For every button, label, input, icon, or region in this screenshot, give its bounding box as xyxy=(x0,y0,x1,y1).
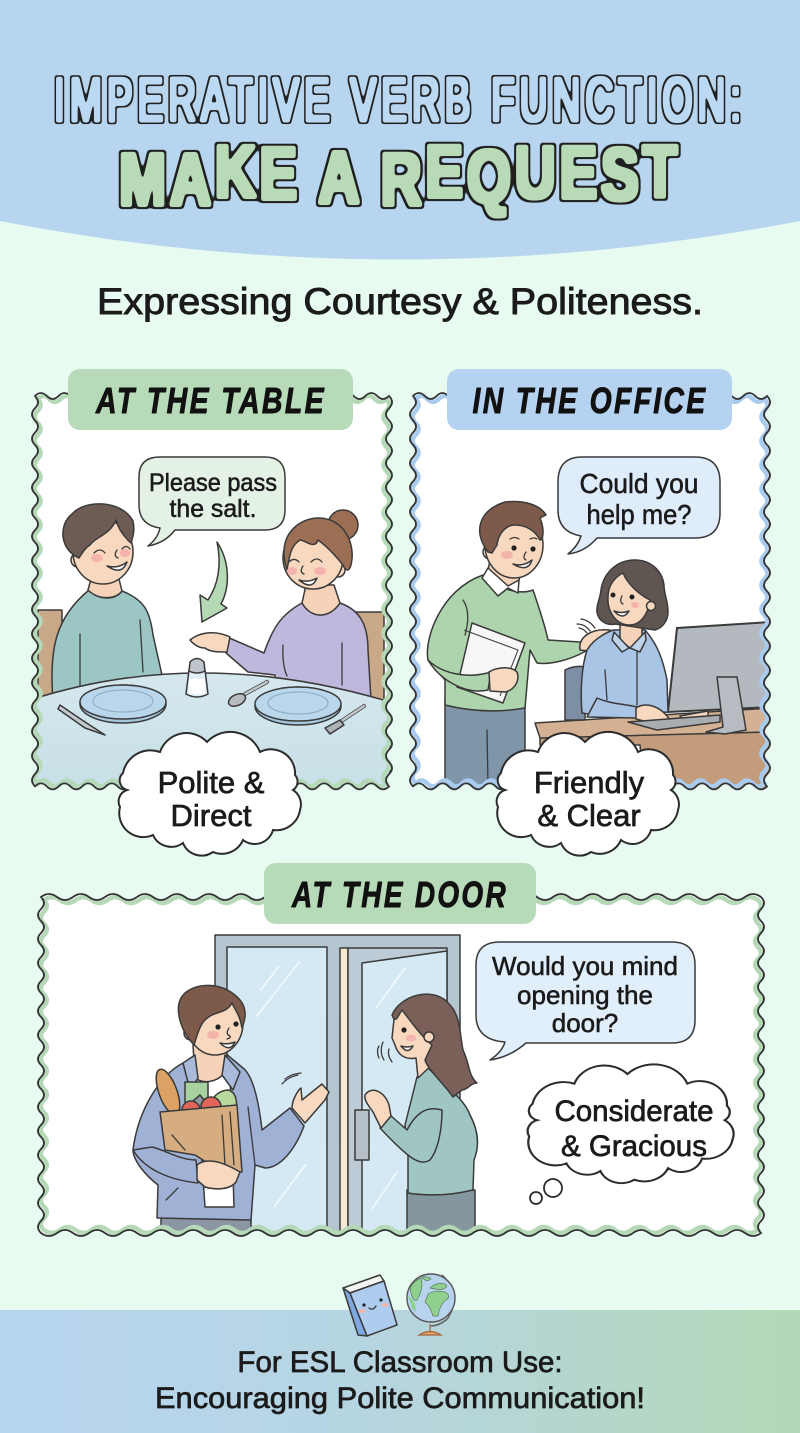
icon: book xyxy=(343,1275,397,1336)
salt shaker xyxy=(186,658,208,697)
title xyxy=(54,66,746,221)
speech bubble: Could you xyxy=(580,468,698,499)
chairs xyxy=(38,610,384,707)
frame border xyxy=(38,894,764,1236)
woman at door xyxy=(365,994,477,1240)
door frame and glass xyxy=(215,935,460,1243)
thought cloud: & Gracious xyxy=(561,1130,707,1163)
office scene illustration xyxy=(427,502,770,800)
heading tab: AT THE TABLE xyxy=(95,380,326,421)
speech bubble: opening the xyxy=(517,980,653,1010)
speech bubble xyxy=(558,457,720,554)
panel: at the door xyxy=(38,863,764,1243)
panel: in the office xyxy=(410,369,770,856)
speech bubble xyxy=(476,942,695,1060)
heading tab xyxy=(264,863,536,924)
icon: globe xyxy=(407,1274,455,1335)
speech bubble: help me? xyxy=(586,499,692,530)
thought cloud xyxy=(528,1064,734,1204)
footer band xyxy=(0,1310,800,1433)
speech bubble: Would you mind xyxy=(492,951,678,981)
man with grocery bag xyxy=(133,985,329,1240)
heading tab xyxy=(447,369,732,430)
speech bubble xyxy=(139,457,285,546)
footer text: For ESL Classroom Use: xyxy=(237,1346,563,1379)
desk xyxy=(534,708,769,788)
plates xyxy=(80,685,341,725)
footer text: Encouraging Polite Communication! xyxy=(155,1382,645,1415)
speech bubble: Please pass xyxy=(149,469,277,497)
speech bubble: door? xyxy=(552,1008,618,1038)
woman in lavender sweater xyxy=(190,510,371,700)
frame border xyxy=(410,393,770,789)
heading tab: AT THE DOOR xyxy=(291,874,508,915)
table scene illustration xyxy=(30,504,390,800)
man in green sweater xyxy=(427,502,612,800)
arrow to salt xyxy=(200,542,227,622)
table xyxy=(30,673,390,800)
footer text xyxy=(155,1346,645,1415)
door scene illustration xyxy=(133,935,477,1243)
cloud: polite and direct: Polite & xyxy=(158,765,265,800)
knife spoon fork xyxy=(58,682,364,735)
frame border xyxy=(32,393,392,789)
heading tab xyxy=(68,369,353,430)
header band xyxy=(0,0,800,260)
monitor xyxy=(668,622,770,734)
cloud: polite and direct xyxy=(119,732,301,856)
cloud: polite and direct: Direct xyxy=(171,798,252,833)
speech bubble: the salt. xyxy=(170,495,256,523)
panel: at the table xyxy=(30,369,392,856)
heading tab: IN THE OFFICE xyxy=(472,380,708,421)
thought cloud: Considerate xyxy=(554,1095,714,1128)
cloud: friendly and clear xyxy=(497,732,679,856)
man in teal sweater xyxy=(52,504,162,700)
woman at desk xyxy=(565,560,720,730)
subtitle: Expressing Courtesy & Politeness. xyxy=(97,281,703,322)
cloud: friendly and clear: & Clear xyxy=(537,798,641,833)
cloud: friendly and clear: Friendly xyxy=(534,765,645,800)
title: MAKE A REQUEST xyxy=(119,130,681,221)
